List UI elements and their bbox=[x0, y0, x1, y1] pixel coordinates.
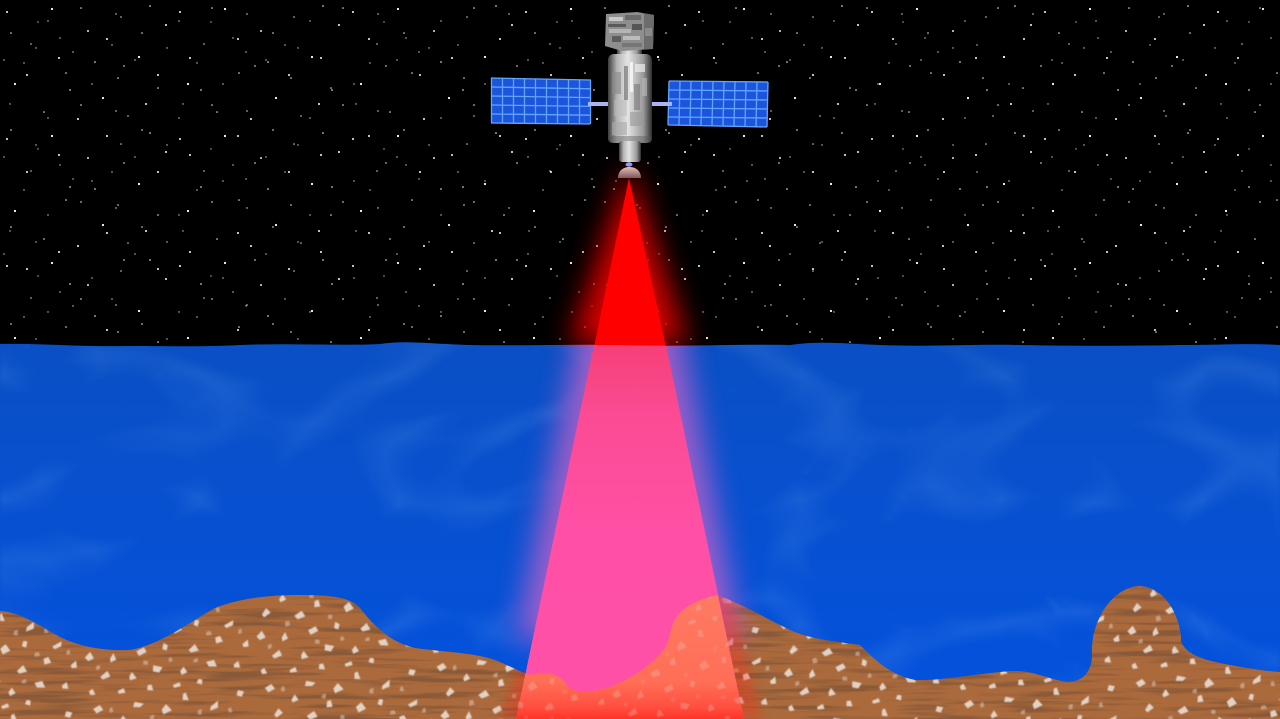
background: starry space bbox=[0, 0, 1280, 350]
sea floor rock bbox=[0, 586, 1280, 719]
main body bbox=[608, 54, 652, 143]
laser beam bbox=[500, 165, 762, 719]
beam glow in space bbox=[570, 165, 688, 345]
neck bbox=[617, 46, 642, 57]
beam core in water bbox=[516, 345, 744, 719]
lower section bbox=[619, 141, 641, 162]
panel arms bbox=[588, 102, 672, 106]
beam glow in water bbox=[515, 300, 742, 640]
beam glow on rock bbox=[500, 590, 762, 719]
ocean water bbox=[0, 342, 1280, 682]
solar panel left bbox=[491, 78, 591, 124]
solar panel right bbox=[668, 81, 768, 127]
sensor dome bbox=[618, 167, 641, 178]
thruster light bbox=[626, 162, 632, 167]
beam core in space bbox=[594, 178, 666, 347]
beam over sea floor bbox=[516, 595, 744, 719]
satellite bbox=[491, 12, 768, 178]
equipment block bbox=[605, 12, 654, 51]
